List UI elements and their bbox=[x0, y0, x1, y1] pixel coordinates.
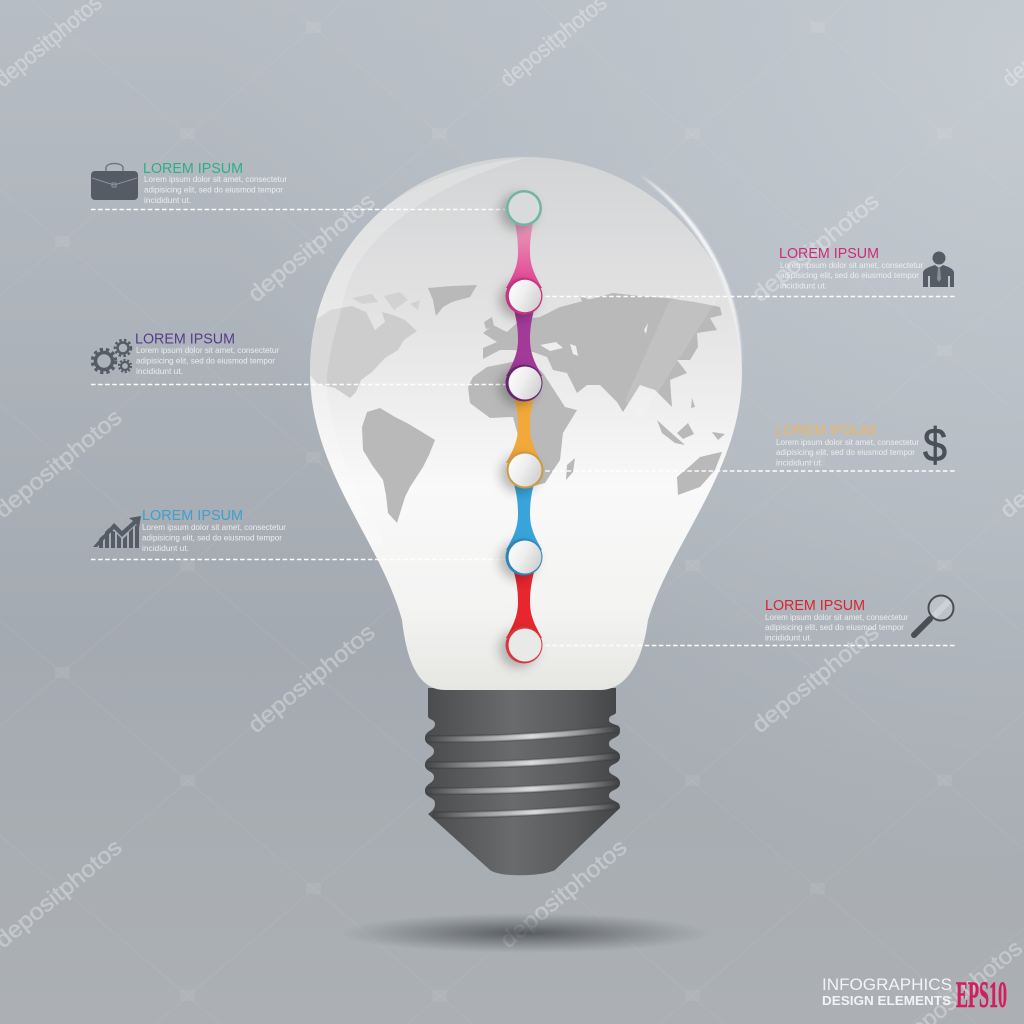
icon: dollar sign: $ bbox=[923, 418, 947, 471]
text block: red: LOREM IPSUM bbox=[765, 598, 865, 614]
Arctic islands bbox=[352, 292, 420, 310]
timeline chain bbox=[506, 190, 544, 664]
text block: red: Lorem ipsum dolor sit amet, consectetur bbox=[765, 612, 908, 622]
text block: pink: LOREM IPSUM bbox=[779, 246, 879, 262]
text block: red: adipisicing elit, sed do eiusmod tempor bbox=[765, 622, 904, 632]
watermarks: depositphotos bbox=[243, 188, 380, 307]
text block: purple: LOREM IPSUM bbox=[135, 332, 235, 348]
footer label: DESIGN ELEMENTS bbox=[822, 993, 951, 1008]
text block: orange: Lorem ipsum dolor sit amet, consectetur bbox=[776, 437, 919, 447]
watermarks: depositphotos bbox=[243, 619, 380, 738]
text block: blue: incididunt ut. bbox=[142, 543, 189, 553]
pink connector bbox=[506, 222, 542, 288]
text block: green: Lorem ipsum dolor sit amet, consectetur bbox=[144, 174, 287, 184]
text block: purple bbox=[135, 332, 279, 376]
text block: pink: Lorem ipsum dolor sit amet, consectetur bbox=[780, 260, 923, 270]
text block: purple: Lorem ipsum dolor sit amet, consectetur bbox=[136, 345, 279, 355]
islands bbox=[484, 296, 725, 445]
text block: pink: incididunt ut. bbox=[780, 280, 827, 290]
node 6 red bbox=[506, 626, 542, 664]
text block: pink: adipisicing elit, sed do eiusmod tempor bbox=[780, 270, 919, 280]
glass reflections bbox=[300, 158, 720, 545]
text block: pink bbox=[779, 246, 923, 290]
text block: orange: LOREM IPSUM bbox=[775, 423, 876, 439]
text block: blue: Lorem ipsum dolor sit amet, consectetur bbox=[142, 522, 286, 532]
Australia bbox=[677, 452, 722, 495]
text block: green: LOREM IPSUM bbox=[143, 161, 243, 177]
text block: green bbox=[143, 161, 287, 205]
watermarks: depositphotos bbox=[747, 188, 884, 307]
text block: red bbox=[765, 598, 908, 642]
footer label: INFOGRAPHICS bbox=[822, 976, 952, 994]
icon: gears bbox=[92, 340, 131, 372]
Madagascar bbox=[566, 458, 575, 480]
screw thread highlights bbox=[429, 729, 616, 815]
node 5 blue bbox=[506, 538, 542, 576]
text block: red: incididunt ut. bbox=[765, 632, 812, 642]
text block: purple: adipisicing elit, sed do eiusmod tempor bbox=[136, 356, 275, 366]
icon: business person bbox=[923, 252, 954, 287]
text block: green: adipisicing elit, sed do eiusmod tempor bbox=[144, 184, 283, 194]
watermarks: depositphotos bbox=[495, 834, 632, 953]
icon: growth chart bbox=[93, 516, 141, 548]
text block: green: incididunt ut. bbox=[144, 195, 191, 205]
dashed leader lines bbox=[91, 210, 955, 646]
text block: blue: LOREM IPSUM bbox=[142, 508, 243, 524]
orange connector bbox=[506, 397, 542, 463]
watermarks: depositphotos bbox=[747, 619, 884, 738]
Greenland bbox=[428, 285, 477, 316]
purple connector bbox=[506, 310, 542, 376]
world map bbox=[305, 285, 725, 523]
node 3 purple bbox=[506, 364, 542, 402]
footer label bbox=[822, 975, 1007, 1016]
node 1 teal bbox=[506, 190, 542, 226]
bulb glass bbox=[310, 157, 742, 690]
South America bbox=[362, 408, 435, 523]
icon: magnifying glass bbox=[914, 596, 954, 635]
bulb ground shadow bbox=[340, 913, 710, 953]
bulb screw base bbox=[425, 688, 620, 875]
Africa bbox=[468, 361, 577, 487]
node 4 orange bbox=[506, 452, 544, 488]
light bulb bbox=[300, 157, 742, 875]
blue connector bbox=[506, 484, 542, 550]
text block: orange bbox=[775, 423, 919, 468]
icon: briefcase bbox=[91, 164, 138, 200]
Eurasia bbox=[483, 293, 722, 412]
glass rim highlight bbox=[640, 175, 742, 365]
node 2 pink bbox=[506, 278, 542, 314]
text block: purple: incididunt ut. bbox=[136, 366, 183, 376]
text block: orange: incididunt ut. bbox=[776, 458, 823, 468]
red connector bbox=[506, 572, 542, 638]
text block: orange: adipisicing elit, sed do eiusmod tempor bbox=[776, 447, 915, 457]
text block: blue: adipisicing elit, sed do eiusmod tempor bbox=[142, 532, 282, 542]
inland seas bbox=[540, 323, 648, 356]
North America bbox=[305, 306, 417, 398]
text block: blue bbox=[142, 508, 286, 553]
